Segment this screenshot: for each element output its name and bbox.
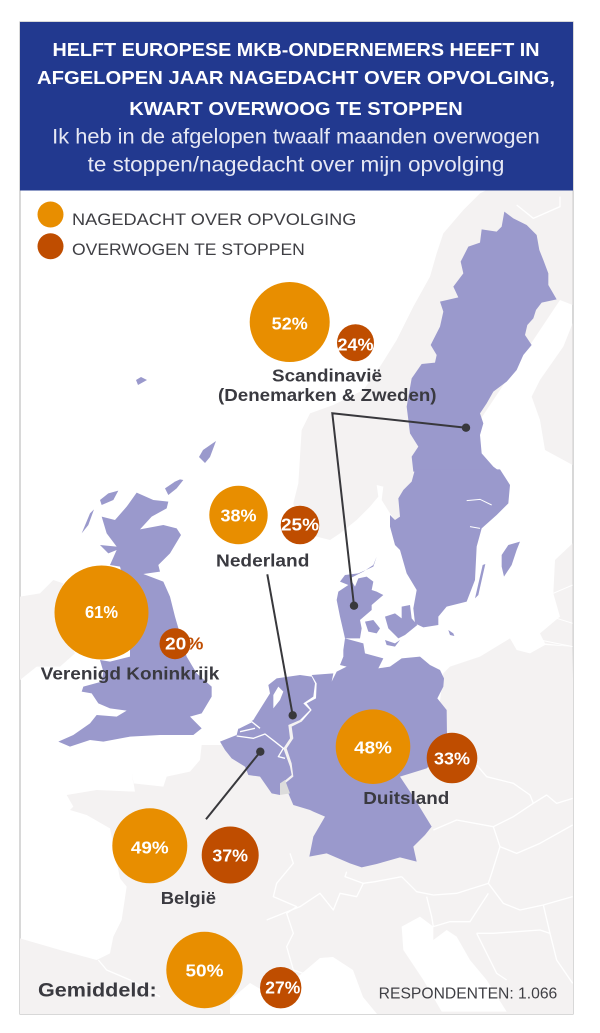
title — [37, 39, 555, 119]
seas and national borders — [98, 765, 573, 1014]
title: KWART OVERWOOG TE STOPPEN — [129, 98, 463, 119]
header band — [20, 22, 573, 190]
bubble 33% — [427, 733, 477, 783]
bubble 61%: 61% — [85, 602, 118, 622]
United Kingdom — [58, 479, 212, 747]
bubble 24% — [337, 324, 374, 361]
legend item: nagedacht — [38, 202, 356, 229]
subtitle: Ik heb in de afgelopen twaalf maanden overwogen — [52, 125, 540, 148]
leader lines — [206, 413, 470, 819]
respondents note: RESPONDENTEN: 1.066 — [379, 985, 557, 1002]
label Verenigd Koninkrijk: Verenigd Koninkrijk — [41, 663, 220, 683]
label Scandinavia — [218, 366, 437, 405]
bubble 33%: 33% — [434, 748, 470, 768]
bubble 50% — [166, 932, 243, 1008]
data: Belgium — [112, 808, 259, 908]
data: Germany — [336, 709, 477, 808]
bubble 24%: 24% — [338, 334, 374, 354]
Netherlands and Belgium — [220, 675, 315, 795]
label Nederland: Nederland — [216, 551, 309, 571]
subtitle — [52, 125, 540, 176]
bubble 52% — [250, 282, 330, 362]
Denmark — [337, 557, 454, 647]
bubble 48% — [336, 709, 410, 784]
legend item: overwogen: OVERWOGEN TE STOPPEN — [72, 240, 305, 259]
label Duitsland: Duitsland — [363, 788, 449, 808]
bubble 27%: 27% — [265, 978, 301, 998]
bubble 37% — [202, 826, 259, 884]
bubble 25%: 25% — [281, 514, 319, 534]
legend item: overwogen — [38, 233, 305, 259]
data: Scandinavia — [218, 282, 437, 405]
bubble 20% — [160, 628, 204, 659]
legend item: nagedacht: NAGEDACHT OVER OPVOLGING — [72, 210, 356, 229]
grey land: Ireland — [20, 580, 75, 680]
leader: Belgium — [206, 748, 264, 819]
leader: Scandinavia — [332, 413, 470, 610]
data: Netherlands — [209, 486, 319, 571]
bubble 27% — [260, 967, 301, 1008]
map of Europe — [13, 190, 587, 1030]
subtitle: te stoppen/nagedacht over mijn opvolging — [88, 153, 504, 176]
bubble 37%: 37% — [212, 845, 248, 865]
label Gemiddeld: Gemiddeld: — [38, 981, 157, 1002]
Sweden — [390, 212, 557, 627]
label Scandinavia: (Denemarken & Zweden) — [218, 385, 437, 405]
data: average — [38, 932, 301, 1008]
data: United Kingdom — [41, 566, 220, 683]
bubble 49% — [112, 808, 187, 883]
bubble 50%: 50% — [186, 960, 224, 980]
grey land: Baltic states and Poland — [440, 544, 573, 998]
bubble 61% — [54, 566, 148, 660]
label Scandinavia: Scandinavië — [272, 366, 382, 386]
title: AFGELOPEN JAAR NAGEDACHT OVER OPVOLGING, — [37, 67, 555, 88]
leader: Netherlands — [267, 574, 297, 720]
bubble 49%: 49% — [131, 838, 169, 858]
bubble 52%: 52% — [272, 314, 308, 334]
bubble 20%: 20% — [165, 634, 204, 654]
grey land: France, Spain and Central Europe — [20, 720, 431, 1014]
legend — [38, 202, 356, 259]
title: HELFT EUROPESE MKB-ONDERNEMERS HEEFT IN — [52, 39, 540, 60]
bubble 38%: 38% — [220, 505, 257, 525]
label Belgie: België — [161, 888, 216, 908]
Shetland and Faroe islands — [136, 377, 216, 463]
grey land: Norway and Finland — [293, 190, 573, 540]
Germany — [285, 638, 447, 867]
bubble 48%: 48% — [354, 738, 392, 758]
